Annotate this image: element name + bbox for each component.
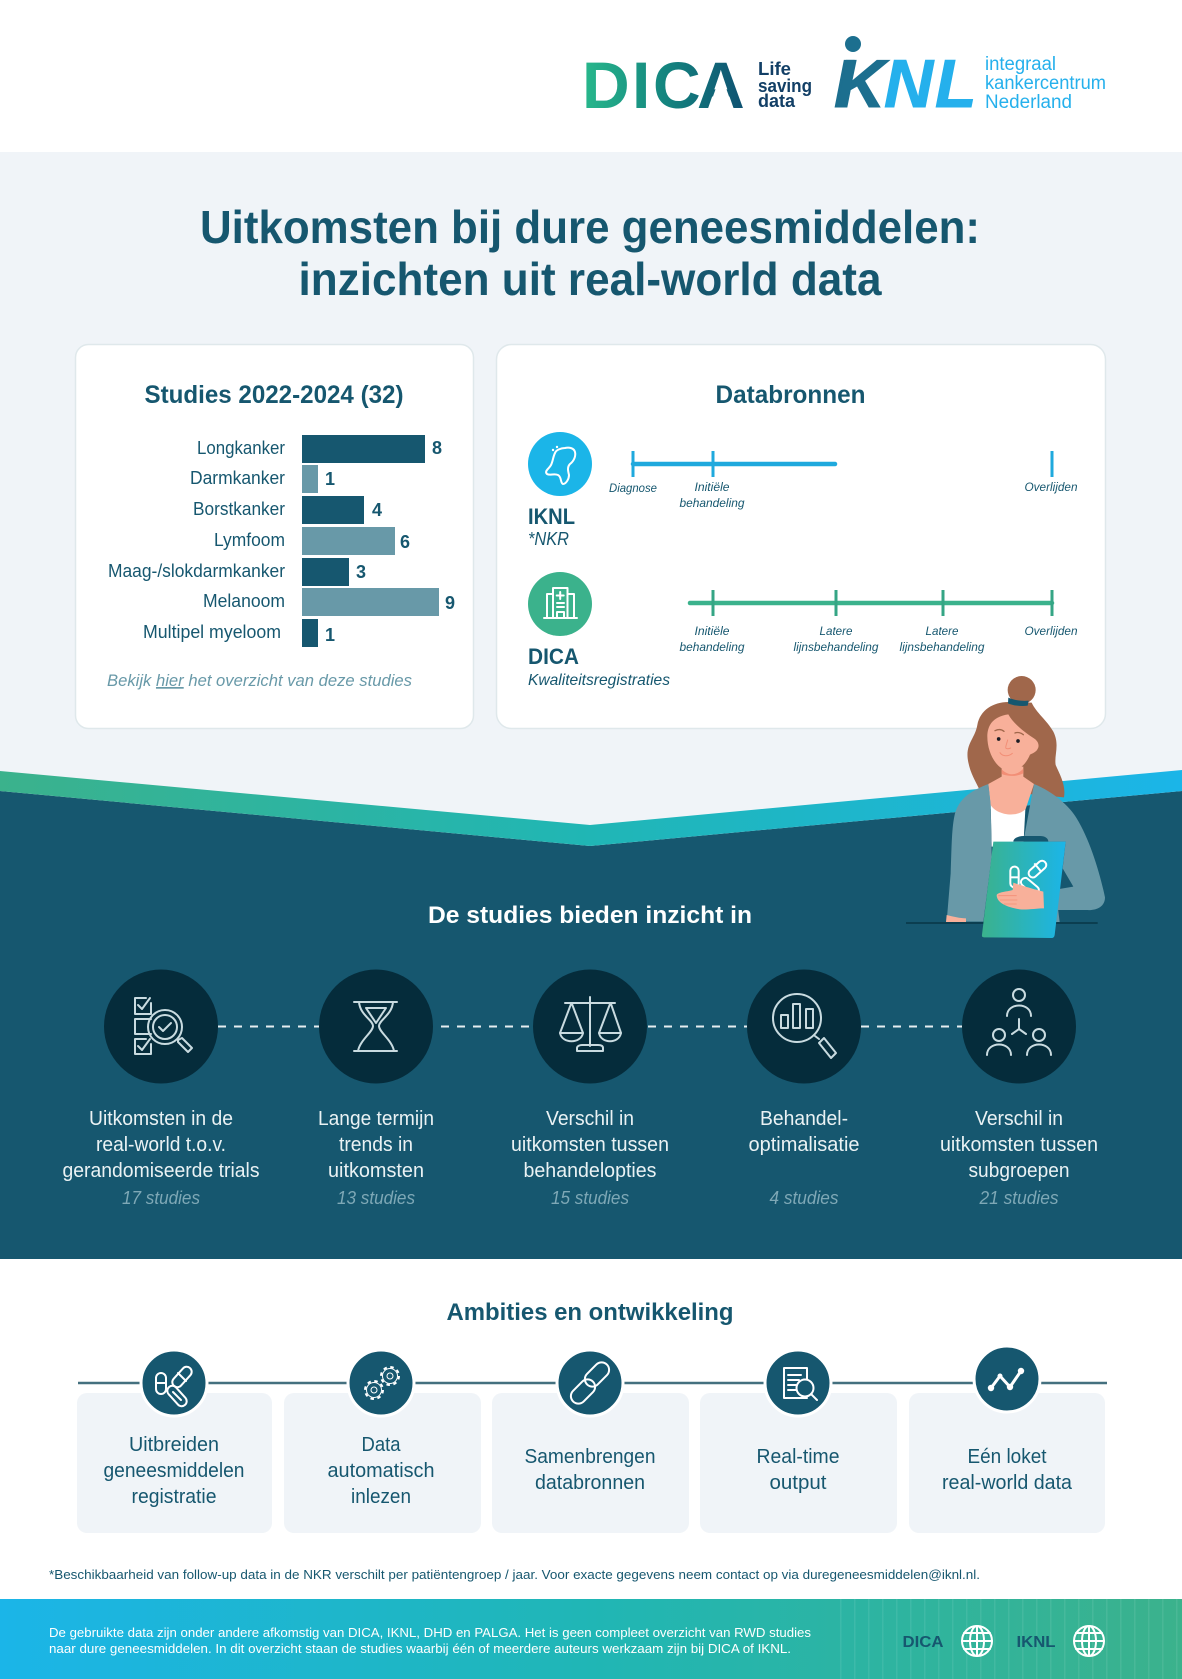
icon: pills — [141, 1350, 207, 1416]
insight 1: trials — [62, 970, 260, 1208]
text: subgroups: Verschil in — [975, 1108, 1063, 1130]
panel: studies 2022-2024 — [76, 344, 474, 728]
label: IKNL NKR: *NKR — [528, 529, 569, 549]
ambition 2: automation — [328, 1350, 434, 1508]
title: Uitkomsten bij dure geneesmiddelen: — [200, 201, 980, 253]
bar chart: studies per tumour type: Melanoom — [203, 591, 285, 611]
ambition 5: one portal — [942, 1346, 1073, 1494]
timeline: DICA: lijnsbehandeling — [900, 640, 985, 654]
bar chart: studies per tumour type: 9 — [445, 593, 455, 613]
footer link: IKNL — [1016, 1626, 1104, 1656]
text: trials: 17 studies — [122, 1188, 200, 1208]
timeline: DICA — [680, 590, 1078, 654]
timeline: IKNL: Initiële — [694, 480, 730, 494]
icon: checklist and magnifier — [135, 998, 192, 1054]
logo: DICA: DICA — [582, 48, 745, 122]
label: DICA kwaliteitsregistraties: Kwaliteitsregistraties — [528, 672, 670, 689]
heading: studies: Studies 2022-2024 (32) — [144, 381, 404, 409]
icon: netherlands map — [528, 432, 592, 496]
text: trials — [62, 1108, 260, 1208]
icon: chain link — [557, 1350, 623, 1416]
footer bar — [0, 1599, 1182, 1679]
text: combining sources: Samenbrengen — [524, 1446, 656, 1468]
text: subgroups: subgroepen — [968, 1160, 1070, 1182]
timeline: DICA: behandeling — [680, 640, 745, 654]
ambition 1: registration — [104, 1350, 244, 1508]
text: subgroups: uitkomsten tussen — [940, 1134, 1098, 1156]
icon: people hierarchy — [987, 989, 1051, 1055]
label: DICA kwaliteitsregistraties: DICA — [528, 644, 579, 669]
text: optimisation: 4 studies — [770, 1188, 838, 1208]
text: one portal: real-world data — [942, 1472, 1073, 1494]
heading: ambitions: Ambities en ontwikkeling — [446, 1299, 734, 1326]
icon: line graph — [974, 1346, 1040, 1412]
text: trends: 13 studies — [337, 1188, 415, 1208]
tagline: integraal kankercentrum Nederland: Nederland — [985, 92, 1072, 113]
title: inzichten uit real-world data — [298, 253, 882, 305]
bar chart: studies per tumour type: Lymfoom — [214, 530, 285, 550]
tagline: Life saving data — [758, 59, 812, 111]
text: trends: uitkomsten — [328, 1160, 424, 1182]
tagline: integraal kankercentrum Nederland: integraal — [985, 54, 1056, 75]
section background: insights — [0, 791, 1182, 1259]
ambition cards — [77, 1393, 1105, 1533]
text: trends — [318, 1108, 434, 1208]
text: combining sources — [524, 1446, 656, 1494]
insight 5: subgroups — [940, 970, 1098, 1208]
timeline: IKNL: behandeling — [680, 496, 745, 510]
text: optimisation: optimalisatie — [748, 1134, 860, 1156]
text: real-time output: output — [770, 1472, 827, 1494]
bar chart: studies per tumour type: 6 — [400, 532, 410, 552]
bar chart: studies per tumour type — [108, 435, 455, 647]
text: treatment options: 15 studies — [551, 1188, 629, 1208]
text: combining sources: databronnen — [535, 1472, 645, 1494]
text: registration — [104, 1434, 244, 1508]
footer link: DICA: DICA — [902, 1634, 944, 1651]
text: subgroups — [940, 1108, 1098, 1208]
header logos — [582, 36, 1106, 122]
text: trials: real-world t.o.v. — [96, 1134, 226, 1156]
text: trials: gerandomiseerde trials — [62, 1160, 260, 1182]
label: DICA kwaliteitsregistraties — [528, 644, 670, 689]
footer text — [49, 1625, 811, 1656]
page background — [0, 152, 1182, 832]
timeline: DICA: Latere — [926, 624, 959, 638]
insight 3: treatment options — [511, 970, 669, 1208]
text: registration: Uitbreiden — [129, 1434, 219, 1456]
icon: gears — [348, 1350, 414, 1416]
ambition timeline line — [78, 1382, 1107, 1384]
timeline: IKNL: Overlijden — [1024, 480, 1078, 494]
text: subgroups: 21 studies — [979, 1188, 1058, 1208]
text: automation: inlezen — [351, 1486, 411, 1508]
timeline: IKNL — [609, 451, 1078, 510]
text: treatment options — [511, 1108, 669, 1208]
text: one portal: Eén loket — [968, 1446, 1047, 1468]
icon: hospital — [528, 572, 592, 636]
label: IKNL NKR — [528, 504, 575, 549]
bar chart: studies per tumour type: 1 — [325, 469, 335, 489]
tagline: integraal kankercentrum Nederland — [985, 54, 1106, 113]
tagline: Life saving data: data — [758, 91, 796, 111]
bar chart: studies per tumour type: Darmkanker — [190, 468, 285, 488]
heading: insights: De studies bieden inzicht in — [428, 902, 752, 929]
bar chart: studies per tumour type: 1 — [325, 625, 335, 645]
text: registration: registratie — [132, 1486, 216, 1508]
timeline: DICA: Initiële — [694, 624, 730, 638]
bar chart: studies per tumour type: 8 — [432, 438, 442, 458]
text: trends: Lange termijn — [318, 1108, 434, 1130]
timeline: DICA: Latere — [820, 624, 853, 638]
text: treatment options: behandelopties — [524, 1160, 656, 1182]
text: trials: Uitkomsten in de — [89, 1108, 233, 1130]
logo: IKNL: IKNL — [834, 46, 977, 122]
footer link: IKNL: IKNL — [1016, 1634, 1056, 1651]
timeline: DICA: lijnsbehandeling — [794, 640, 879, 654]
icon: magnifier with bars — [773, 994, 836, 1058]
footer link: DICA — [902, 1626, 992, 1656]
text: automation — [328, 1434, 434, 1508]
text: real-time output: Real-time — [756, 1446, 840, 1468]
bar chart: studies per tumour type: Maag-/slokdarmkanker — [108, 561, 285, 581]
bar chart: studies per tumour type: 3 — [356, 562, 366, 582]
tagline: integraal kankercentrum Nederland: kankercentrum — [985, 73, 1106, 94]
text: treatment options: Verschil in — [546, 1108, 634, 1130]
bar chart: studies per tumour type: Longkanker — [197, 438, 285, 458]
text: trends: trends in — [339, 1134, 413, 1156]
text: real-time output — [756, 1446, 840, 1494]
tagline: Life saving data: saving — [758, 76, 812, 96]
timeline: DICA: Overlijden — [1024, 624, 1078, 638]
insight 4: optimisation — [747, 970, 861, 1208]
title — [200, 201, 980, 305]
panel: databronnen — [496, 344, 1106, 728]
heading: databronnen: Databronnen — [716, 381, 866, 409]
link text: Bekijk hier het overzicht van deze studies — [107, 671, 412, 690]
label: IKNL NKR: IKNL — [528, 504, 575, 529]
text: one portal — [942, 1446, 1073, 1494]
bar chart: studies per tumour type: Borstkanker — [193, 499, 285, 519]
text: automation: automatisch — [328, 1460, 434, 1482]
text: registration: geneesmiddelen — [104, 1460, 244, 1482]
footer text: De gebruikte data zijn onder andere afkomstig van DICA, IKNL, DHD en PALGA. Het is geen compleet overzicht van RWD studies — [49, 1625, 811, 1640]
text: optimisation: Behandel- — [760, 1108, 848, 1130]
bar chart: studies per tumour type: Multipel myeloom — [143, 622, 281, 642]
illustration: woman with clipboard — [906, 676, 1105, 938]
timeline: IKNL: Diagnose — [609, 481, 657, 495]
text: treatment options: uitkomsten tussen — [511, 1134, 669, 1156]
ambition 4: real-time output — [756, 1350, 840, 1494]
gradient chevron band — [0, 770, 1182, 846]
icon: scales — [560, 997, 621, 1051]
footnote: *Beschikbaarheid van follow-up data in de NKR verschilt per patiëntengroep / jaar. Voor exacte gegevens neem contact op via duregeneesmiddelen@iknl.nl. — [49, 1567, 980, 1582]
text: optimisation — [748, 1108, 860, 1208]
dashed connectors — [218, 1026, 962, 1028]
icon: document with magnifier — [765, 1350, 831, 1416]
ambition 3: combining sources — [524, 1350, 656, 1494]
footer text: naar dure geneesmiddelen. In dit overzicht staan de studies waarbij één of meerdere auteurs werkzaam zijn bij DICA of IKNL. — [49, 1641, 791, 1656]
bar chart: studies per tumour type: 4 — [372, 500, 382, 520]
tagline: Life saving data: Life — [758, 59, 791, 79]
insight 2: trends — [318, 970, 434, 1208]
icon: hourglass — [354, 1002, 397, 1051]
text: automation: Data — [362, 1434, 401, 1456]
